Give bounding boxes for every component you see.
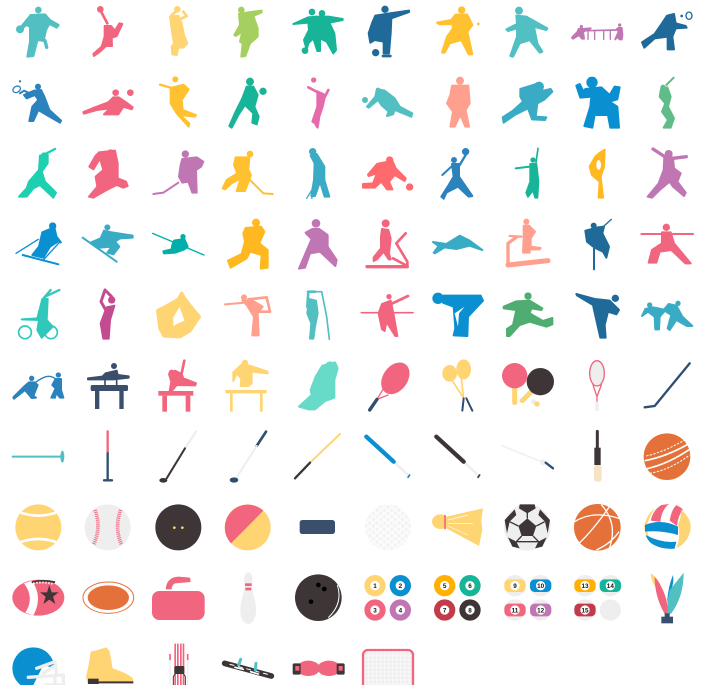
- icon: tennis ball: [15, 504, 61, 550]
- icon: billiard balls 9 to 12: [504, 575, 551, 621]
- icon: karate kick: [576, 294, 619, 338]
- icon: bowling ball: [295, 574, 342, 621]
- icon: hurdler: [504, 292, 552, 336]
- icon: billiard cue: [295, 434, 340, 478]
- icon: baseball batter green: [660, 78, 674, 128]
- icon: two soccer players: [293, 9, 343, 54]
- icon: basketball shooter: [170, 6, 187, 55]
- icon: badminton rackets: [442, 359, 472, 411]
- icon: golf putter: [230, 432, 266, 483]
- icon: billiard balls 1 to 4: [364, 575, 411, 621]
- icon: hockey stick: [645, 363, 690, 407]
- icon: billiard balls 13 to 15 and cue ball: [574, 575, 621, 621]
- icon: cricket bat: [594, 431, 602, 482]
- icon: fencing foil: [502, 446, 553, 468]
- icon: basketball dunk: [93, 6, 122, 56]
- panel: athlete silhouettes and rackets, middle right: [361, 219, 693, 411]
- icon: hockey player purple: [153, 150, 203, 194]
- icon: billiard balls 9 to 12: 11: [512, 607, 519, 614]
- icon: skis and poles: [170, 643, 188, 687]
- icon: table tennis player yellow: [437, 6, 480, 54]
- icon: skier: [16, 222, 61, 264]
- icon: feather shuttlecock: [651, 573, 684, 623]
- icon: contortionist bridge: [158, 293, 199, 337]
- icon: volleyball player holding ball: [229, 78, 267, 128]
- icon: ice skate boot: [86, 647, 134, 684]
- icon: billiard balls 9 to 12: 10: [537, 583, 545, 590]
- icon: soccer kicker: [369, 6, 409, 56]
- icon: lunging player: [89, 149, 128, 198]
- icon: hockey puck: [300, 520, 335, 534]
- icon: gymnast on vault: [158, 361, 196, 412]
- icon: volleyball: [644, 503, 691, 550]
- panel: athlete silhouettes, upper left: [12, 6, 343, 198]
- icon: billiard balls 1 to 4: 1: [373, 583, 377, 590]
- icon: american football: [12, 580, 64, 616]
- icon: table tennis player teal: [506, 7, 547, 57]
- icon: volleyball dig: [362, 88, 412, 117]
- icon: croquet mallet: [104, 431, 112, 480]
- icon: squash ball: [155, 504, 201, 550]
- icon: football runner: [503, 82, 552, 123]
- icon: treadmill runner salmon: [508, 219, 548, 265]
- icon: table tennis paddles: [502, 363, 554, 407]
- icon: golfer: [307, 148, 329, 198]
- icon: football helmet: [12, 647, 64, 689]
- icon: curling stone: [152, 577, 205, 620]
- icon: basketball: [574, 504, 621, 551]
- panel: equipment left: [12, 431, 345, 689]
- icon: football player kneeling: [576, 77, 620, 128]
- icon: yoga warrior pose: [641, 224, 693, 263]
- icon: tennis player: [12, 80, 61, 123]
- icon: table tennis match: [572, 23, 622, 39]
- icon: two-tone ball: [225, 504, 271, 550]
- icon: billiard balls 1 to 4: 4: [399, 607, 403, 614]
- icon: billiard balls 1 to 4: 2: [399, 583, 403, 590]
- panel: equipment right: [363, 431, 691, 693]
- icon: cricket ball: [644, 433, 690, 480]
- icon: billiard balls 5 to 8: 6: [468, 583, 472, 590]
- icon: cyclist celebrating: [19, 290, 59, 339]
- icon: billiard balls 5 to 8: [434, 575, 481, 621]
- icon: bowler: [363, 156, 413, 191]
- icon: fencers: [13, 372, 63, 399]
- icon: baseball bat: [436, 437, 480, 477]
- icon: runner purple: [299, 219, 337, 269]
- icon: yoga dancer pose: [225, 294, 270, 335]
- icon: billiard balls 5 to 8: 5: [443, 583, 447, 590]
- icon: dancer leaping: [648, 149, 686, 198]
- icon: bowling pin: [240, 572, 256, 624]
- icon: shuttlecock: [432, 508, 483, 546]
- icon: billiard balls 9 to 12: 9: [513, 583, 517, 590]
- icon: baseball batter: [19, 149, 56, 198]
- icon: figure skater spin: [590, 150, 605, 198]
- icon: swimmer: [433, 236, 482, 253]
- icon: gymnast on beam: [225, 360, 268, 412]
- icon: tennis forehand: [642, 12, 692, 49]
- icon: diver bending: [432, 293, 483, 336]
- icon: rhythmic gymnast: [101, 290, 115, 339]
- icon: seated stretching figure: [299, 361, 338, 409]
- icon: volleyball serve: [308, 77, 328, 128]
- icon: soccer player green: [234, 7, 262, 57]
- icon: billiard balls 9 to 12: 12: [537, 607, 545, 614]
- icon: snowboard: [225, 659, 271, 676]
- icon: pole vaulter: [307, 292, 329, 339]
- icon: cross-country skier: [153, 233, 204, 255]
- icon: figure skater arms raised: [516, 148, 538, 198]
- icon: volleyball spike: [160, 76, 196, 127]
- icon: billiard balls 13 to 15 and cue ball: 14: [607, 583, 614, 590]
- icon: taekwondo sparring: [642, 301, 692, 330]
- icon: billiard balls 1 to 4: 3: [373, 607, 377, 614]
- icon: golf iron: [159, 432, 196, 483]
- icon: hockey goal net: [362, 648, 414, 685]
- icon: ski goggles and gloves: [293, 661, 345, 676]
- icon: billiard balls 5 to 8: 7: [443, 607, 447, 614]
- panel: athlete silhouettes, middle left: [13, 219, 338, 412]
- icon: high jumper: [361, 294, 413, 336]
- icon: pommel horse: [88, 363, 129, 409]
- icon: billiard balls 13 to 15 and cue ball: 13: [581, 583, 589, 590]
- icon: climber: [585, 219, 611, 269]
- icon: softball bat: [366, 437, 410, 477]
- icon: tennis racket: [370, 357, 415, 410]
- icon: soccer ball: [504, 504, 551, 551]
- icon: runner yellow: [228, 219, 268, 269]
- icon: rugby ball: [83, 582, 134, 613]
- icon: basketball player passing: [441, 148, 472, 199]
- icon: baseball: [85, 504, 131, 550]
- icon: volleyball dive: [83, 89, 134, 114]
- icon: treadmill runner pink: [367, 219, 407, 267]
- icon: billiard balls 5 to 8: 8: [468, 607, 472, 614]
- icon: polo mallet: [13, 451, 64, 463]
- panel: athlete silhouettes, upper right: [362, 6, 692, 199]
- icon: golf ball: [365, 504, 411, 550]
- icon: football player standing: [447, 77, 470, 127]
- icon: hockey player yellow: [223, 151, 273, 194]
- icon: snowboarder: [83, 224, 133, 262]
- icon: squash racket: [590, 361, 604, 411]
- icon: billiard balls 13 to 15 and cue ball: 15: [581, 607, 589, 614]
- icon: basketball dribbler: [16, 7, 59, 57]
